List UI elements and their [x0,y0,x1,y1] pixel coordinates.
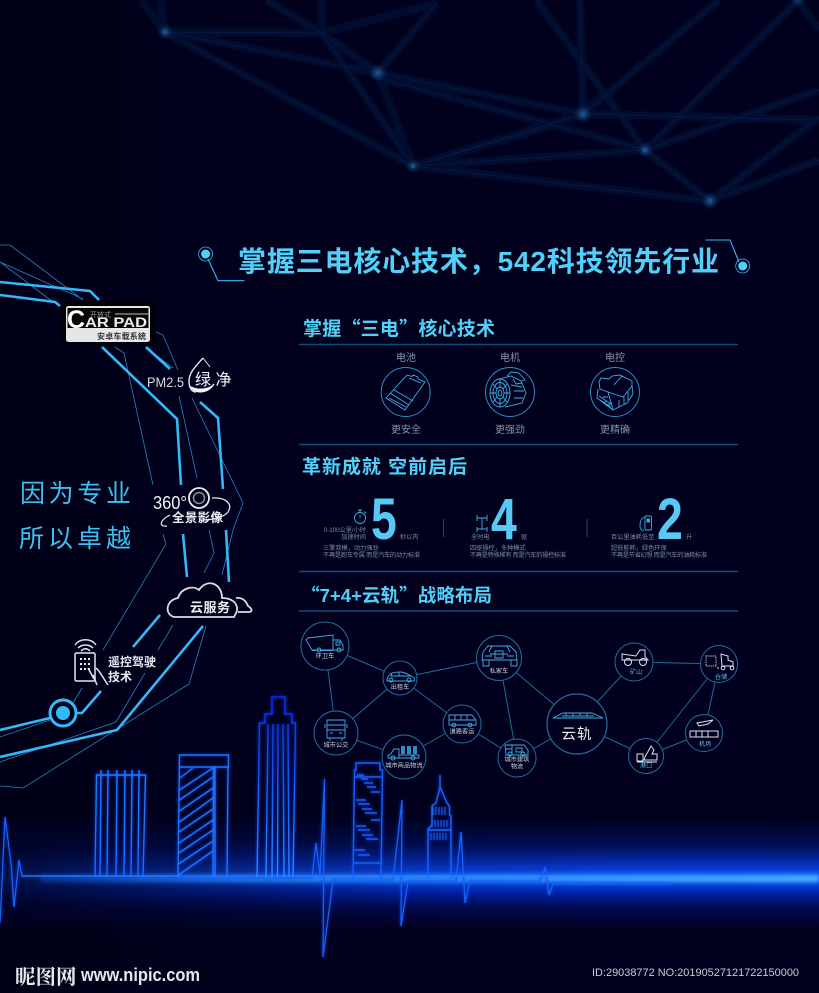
watermark: site logo: www.nipic.com [80,965,200,985]
badge: Car Pad: C [67,306,85,334]
section: three electrics: 电池 [396,351,416,364]
left slogan: 所以卓越 [19,525,131,553]
stat: 2 liters: 不再是节省幻想 而是汽车的油耗标准 [611,551,707,559]
stat: 5 seconds [323,487,420,559]
section: three electrics: 更精确 [600,423,630,436]
section: three electrics: 更安全 [391,423,421,436]
icon: title left connector [199,247,244,281]
node: urban construction logistics: 物流 [511,762,523,770]
stat: 4 wheel drive: 4 [491,487,517,552]
thin circuit lines [0,245,243,788]
watermark: site logo: 昵图网 [15,960,76,990]
badge: 360 surround view: 全景影像 [172,510,223,525]
badge: PM2.5 green purification: 绿 [195,371,211,389]
circuit lines on the left [0,245,243,788]
badge: 360 surround view [153,488,230,526]
badge: 360 surround view: 360° [153,493,187,513]
building 3 [257,697,296,878]
node: private car [476,636,522,680]
node: urban construction logistics: 城市建筑 [505,756,530,764]
badge: Car Pad: 开放式 [90,310,111,319]
stat: 5 seconds: 不再是跑车专属 而是汽车的动力标准 [323,551,420,559]
badge: remote driving: 技术 [108,669,132,684]
heading: 掌握“三电”核心技术 [303,314,495,341]
section: three electrics: 更强劲 [495,424,525,436]
node: taxi: 出租车 [391,683,409,691]
node: airport [686,714,722,752]
badge: Car Pad [61,301,155,346]
heading: “7+4+云轨”战略布局 [301,582,492,608]
heartbeat line [0,779,672,957]
node: taxi [383,661,417,695]
icon: battery [381,368,430,416]
badge: remote driving [75,640,156,685]
stat: 5 seconds: 加速时间 [341,533,366,541]
section: three electrics: 电机 [500,351,520,364]
node: cloud rail: 云轨 [562,726,592,743]
node: urban goods logistics [382,735,426,779]
icon: motor [486,368,534,416]
network links [325,646,719,758]
watermark: site logo [15,960,200,990]
node: cloud rail [547,694,607,754]
badge: cloud service [168,583,252,617]
badge: PM2.5 green purification: PM2.5 [147,375,184,390]
node: road passenger: 道路客运 [450,728,474,736]
main title: 掌握三电核心技术，542科技领先行业 [238,246,719,277]
stat: 5 seconds: 5 [371,487,397,552]
stat: 5 seconds: 0-100公里/小时 [324,526,366,534]
badge: remote driving: 遥控驾驶 [108,654,156,669]
stat: 4 wheel drive: 驱 [521,534,527,541]
building 1 [95,770,146,877]
node: warehouse [700,646,738,682]
thick circuit lines [0,282,229,757]
badge: PM2.5 green purification: 净 [216,371,232,389]
node: port: 港口 [640,762,652,770]
stat: 4 wheel drive: 四驱操控，多种模式 [470,544,526,552]
node: sanitation truck [301,622,349,670]
icon: title right connector [706,240,750,273]
badge: cloud service: 云服务 [190,600,230,615]
heading: 革新成就 空前启后 [302,455,467,478]
building 4 [353,763,382,878]
badge: Car Pad: 安卓车载系统 [97,331,146,341]
node: port [628,738,664,774]
stat: 2 liters [611,487,707,559]
node: road passenger [443,705,481,743]
circuit node [50,700,76,726]
badge: PM2.5 green purification [147,358,232,392]
node: city bus [314,711,358,755]
city skyline [0,697,819,957]
stat: 2 liters: 2 [657,487,683,552]
stat: 5 seconds: 三擎双模，动力强劲 [323,544,379,552]
icon: controller [590,368,640,416]
stat: 4 wheel drive: 不再是特殊稀有 而是汽车的操控标准 [470,551,566,559]
building 2 [178,755,228,877]
stat: 2 liters: 超低能耗，绿色环保 [611,544,667,552]
decorative network at top [141,0,819,206]
section: strategy network [299,582,738,779]
node: warehouse: 仓储 [715,673,727,681]
node: sanitation truck: 环卫车 [316,652,334,660]
node: mine [615,643,653,681]
section: three electrics: 电控 [605,351,625,364]
badge: Car Pad: AR PAD [85,315,147,330]
node: airport: 机场 [699,740,711,748]
section: achievements [299,455,738,572]
stat: 5 seconds: 秒以内 [400,533,419,541]
stat: 2 liters: 百公里油耗低至 [611,533,654,541]
building 5 [428,775,451,878]
node: urban goods logistics: 城市商品物流 [385,762,423,770]
node: urban construction logistics [498,739,536,777]
node: mine: 矿山 [630,668,642,676]
blue glow band at horizon [0,818,819,930]
stat: 4 wheel drive: 全时电 [471,533,490,541]
node: city bus: 城市公交 [324,741,348,749]
section: three electrics [299,314,738,444]
watermark: image id: ID:29038772 NO:20190527121722150000 [592,967,799,979]
left slogan [19,480,131,553]
node: private car: 私家车 [490,667,508,675]
stat: 2 liters: 升 [686,533,692,541]
left slogan: 因为专业 [20,480,131,508]
stat: 4 wheel drive [470,487,566,559]
